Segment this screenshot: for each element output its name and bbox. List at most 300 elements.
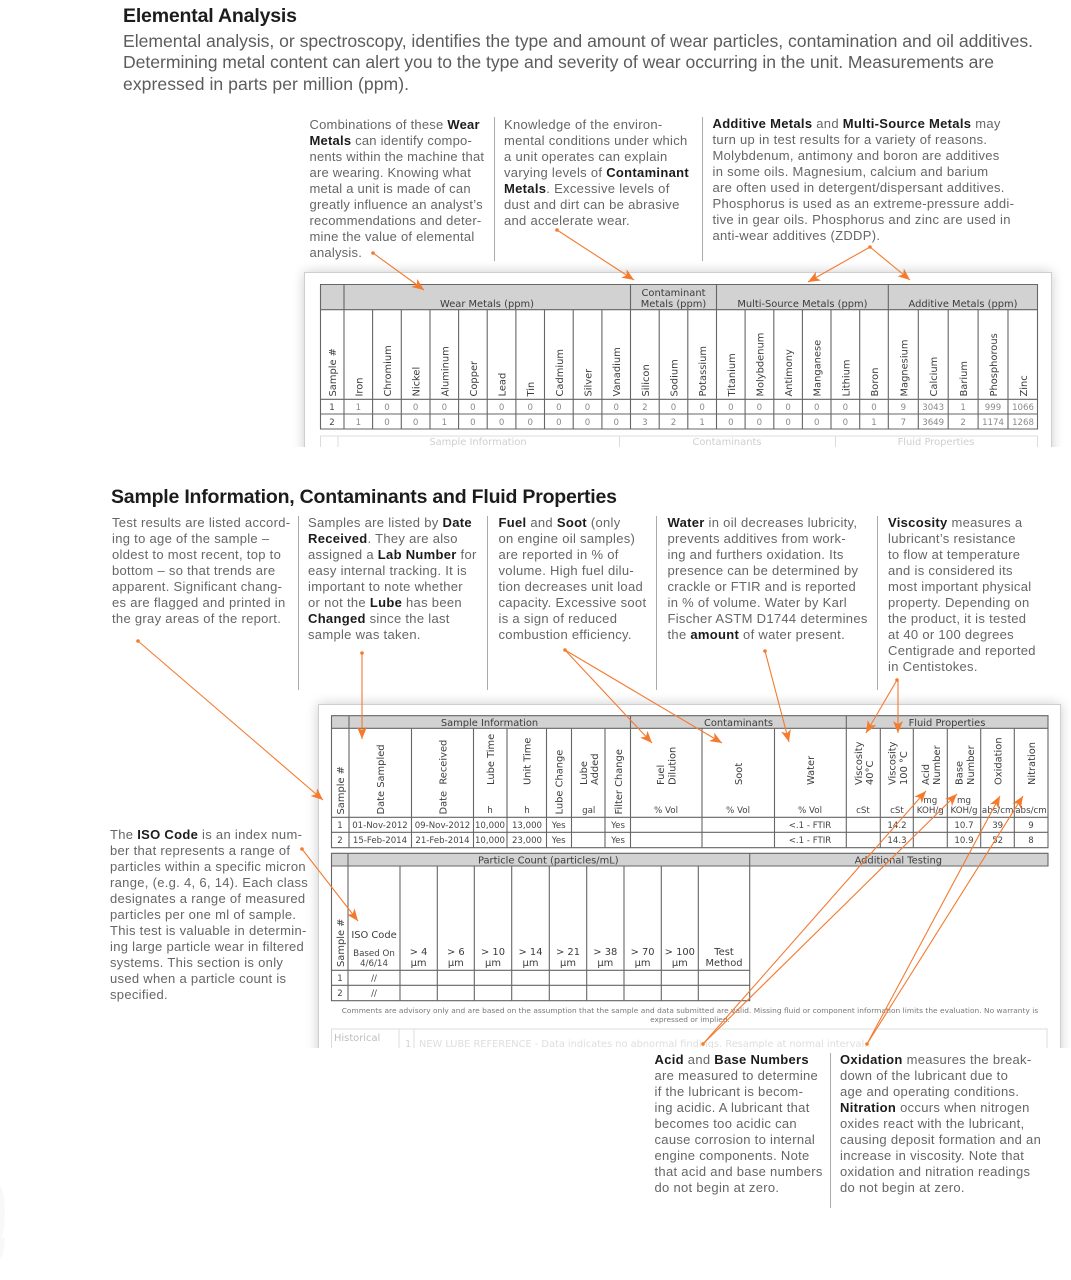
- text block: oxidation and nitration: [840, 1052, 1041, 1195]
- table: elemental results: [320, 284, 1038, 429]
- text block: contaminant metals: Metals. Excessive levels of: [504, 181, 670, 196]
- table 3 header band: [332, 853, 1048, 866]
- sample row 1 values: 0: [413, 403, 418, 413]
- text block: contaminant metals: varying levels of Contaminant: [504, 165, 689, 180]
- text block: acid and base numbers: ing acidic. A lubricant that: [654, 1100, 810, 1115]
- sample row 2 values: 3: [642, 418, 648, 428]
- sample row 1 values: 1: [960, 403, 966, 413]
- table: sample information, contaminants, fluid properties: Contaminants: [704, 718, 773, 729]
- table: particle count and additional testing: [332, 853, 1048, 1001]
- text block: additive and multi-source metals: Molybdenum, antimony and boron are additives: [712, 148, 1000, 163]
- text block: wear metals: greatly influence an analyst’s: [310, 197, 483, 212]
- row 1 values: Yes: [610, 821, 625, 831]
- table 2 header band: [332, 716, 1048, 728]
- sample row 2 values: 7: [901, 418, 906, 428]
- table: elemental results: Sample #: [328, 348, 339, 396]
- arrows: multi-source and additive metals: [808, 245, 910, 282]
- faded next table header: Sample Information: [429, 437, 527, 448]
- row 2 values: 21-Feb-2014: [415, 836, 470, 846]
- text block: date received: or not the Lube has been: [308, 595, 462, 610]
- text block: wear metals: Metals can identify compo-: [310, 133, 472, 148]
- table: sample information, contaminants, fluid properties: Number: [932, 744, 943, 785]
- text block: additive and multi-source metals: [712, 116, 1014, 243]
- sample row 2 values: 1: [699, 418, 705, 428]
- text block: test results: [112, 515, 290, 626]
- text block: fuel and soot: is a sign of reduced: [498, 611, 617, 626]
- sample row 2 values: 1174: [982, 418, 1004, 428]
- table: particle count and additional testing: µm: [411, 958, 427, 969]
- table: elemental results: Titanium: [727, 353, 738, 398]
- disclaimer text: Comments are advisory only and are based on the assumption that the sample and data submitted are valid. Missing fluid or component information limits the evaluation. No warranty is: [342, 1006, 1038, 1015]
- text block: contaminant metals: Knowledge of the environ-: [504, 117, 663, 132]
- sample row 1 values: 9: [901, 403, 906, 413]
- units row: % Vol: [654, 806, 678, 816]
- faded next table header: Contaminants: [692, 437, 762, 448]
- text block: viscosity: property. Depending on: [888, 595, 1030, 610]
- text block: contaminant metals: and accelerate wear.: [504, 213, 630, 228]
- sample row 2 values: 0: [384, 418, 390, 428]
- units row: KOH/g: [950, 806, 978, 816]
- text block: ISO code: This test is valuable in determin-: [110, 923, 307, 938]
- table: sample information, contaminants, fluid properties: Viscosity: [888, 741, 899, 785]
- sample row 1 values: 0: [785, 403, 791, 413]
- text block: water: prevents additives from work-: [668, 531, 846, 546]
- table: particle count and additional testing: µm: [560, 958, 576, 969]
- arrows: oxidation and nitration: [865, 796, 1023, 1046]
- table: particle count and additional testing: Particle Count (particles/mL): [478, 856, 619, 866]
- row 1 values: <.1 - FTIR: [789, 821, 831, 831]
- text block: test results: bottom – so that trends are: [112, 563, 275, 578]
- table: elemental results: Boron: [870, 368, 881, 396]
- table: elemental results: Cadmium: [555, 349, 566, 396]
- row 2 values: 52: [992, 836, 1003, 846]
- sample row 2 values: 0: [757, 418, 762, 428]
- text block: viscosity: in Centistokes.: [888, 659, 978, 674]
- text block: oxidation and nitration: oxidation and nitration readings: [840, 1164, 1030, 1179]
- units row: gal: [582, 806, 595, 816]
- sample row 2 values: 0: [556, 418, 562, 428]
- row 2 values: 23,000: [512, 836, 542, 846]
- sample row 2 values: 3649: [922, 418, 944, 428]
- units row: mg: [957, 796, 971, 806]
- row 2 values: 10.9: [954, 836, 974, 846]
- table: elemental results: Multi-Source Metals (ppm): [737, 299, 867, 310]
- text block: water: the amount of water present.: [668, 627, 845, 642]
- text block: date received: Samples are listed by Date: [308, 515, 472, 530]
- table: particle count and additional testing: > 4: [410, 947, 427, 958]
- text block: water: in % of volume. Water by Karl: [668, 595, 847, 610]
- table: particle count and additional testing: µm: [448, 958, 464, 969]
- table: particle count and additional testing: > 100: [665, 947, 695, 958]
- text block: contaminant metals: a unit operates can explain: [504, 149, 667, 164]
- table: sample information, contaminants, fluid properties: Base: [954, 761, 965, 785]
- faded historical comments row: [331, 1028, 1048, 1048]
- row 2 values: 2: [337, 836, 343, 846]
- text block: oxidation and nitration: do not begin at zero.: [840, 1180, 965, 1195]
- text block: ISO code: range, (e.g. 4, 6, 14). Each class: [110, 875, 308, 890]
- text block: wear metals: Combinations of these Wear: [310, 117, 480, 132]
- arrow: wear metals: [371, 251, 424, 290]
- arrows: fuel dilution and soot: [563, 648, 722, 743]
- text block: ISO code: The ISO Code is an index num-: [110, 827, 302, 842]
- text block: test results: Test results are listed accord-: [112, 515, 290, 530]
- text block: water: [668, 515, 868, 642]
- table: elemental results: Copper: [469, 360, 480, 396]
- row 1 values: 9: [1028, 821, 1034, 831]
- text block: water: ing and furthers oxidation. Its: [668, 547, 844, 562]
- text block: wear metals: recommendations and deter-: [310, 213, 481, 228]
- sample row 1 values: 0: [585, 403, 590, 413]
- text block: fuel and soot: capacity. Excessive soot: [498, 595, 646, 610]
- intro text block: Elemental analysis, or spectroscopy, identifies the type and amount of wear particles, contamination and oil additives.: [123, 31, 1033, 51]
- text block: wear metals: are wearing. Knowing what: [310, 165, 471, 180]
- text block: contaminant metals: mental conditions under which: [504, 133, 688, 148]
- table: sample information, contaminants, fluid properties: Nitration: [1027, 742, 1038, 785]
- sample row 1 values: 0: [556, 403, 562, 413]
- table: sample information, contaminants, fluid properties: Lube Time: [486, 734, 497, 785]
- text block: viscosity: Viscosity measures a: [888, 515, 1023, 530]
- text block: oxidation and nitration: age and operating conditions.: [840, 1084, 1019, 1099]
- row 2 values: 8: [1028, 836, 1034, 846]
- text block: wear metals: nents within the machine that: [310, 149, 484, 164]
- text block: acid and base numbers: [654, 1052, 823, 1195]
- table: particle count and additional testing: Additional Testing: [855, 856, 942, 866]
- text block: acid and base numbers: if the lubricant is becom-: [654, 1084, 803, 1099]
- text block: wear metals: [310, 117, 484, 260]
- text block: date received: assigned a Lab Number for: [308, 547, 477, 562]
- sample row 1 values: 999: [985, 403, 1001, 413]
- table: elemental results: Metals (ppm): [641, 299, 706, 310]
- table: sample information, contaminants, fluid properties: Number: [966, 744, 977, 785]
- row 2 values: <.1 - FTIR: [789, 836, 831, 846]
- table: particle count and additional testing: 4/6/14: [360, 959, 388, 969]
- row 2 values: 14.3: [887, 836, 907, 846]
- sample row 2 values: 0: [843, 418, 848, 428]
- row 1 values: 14.2: [887, 821, 907, 831]
- table: sample information, contaminants, fluid properties: Lube Change: [555, 750, 566, 814]
- text block: viscosity: Centigrade and reported: [888, 643, 1036, 658]
- row 2 values: [338, 836, 1034, 844]
- table: sample information, contaminants, fluid properties: Date Received: [439, 740, 450, 814]
- text block: ISO code: systems. This section is only: [110, 955, 283, 970]
- faded historical comments row: Historical: [334, 1033, 380, 1044]
- sample row 2 values: 1: [442, 418, 447, 428]
- table: elemental results: Vanadium: [612, 347, 623, 396]
- text block: fuel and soot: are reported in % of: [498, 547, 619, 562]
- sample row 1 values: 0: [843, 403, 848, 413]
- sample row 2 values: [330, 418, 1034, 425]
- sample row 1 values: [330, 404, 1034, 410]
- table: particle count and additional testing: µm: [635, 958, 651, 969]
- intro text block: [123, 31, 1033, 94]
- disclaimer text: expressed or implied.: [650, 1015, 730, 1024]
- table: elemental results: Contaminant: [642, 288, 706, 299]
- text block: oxidation and nitration: increase in viscosity. Note that: [840, 1148, 1024, 1163]
- text block: date received: [308, 515, 477, 642]
- faded next table header: Fluid Properties: [898, 437, 974, 448]
- table: sample information, contaminants, fluid properties: Filter Change: [614, 749, 625, 814]
- text block: test results: ing to age of the sample –: [112, 531, 270, 546]
- table: sample information, contaminants, fluid properties: Fluid Properties: [909, 718, 985, 729]
- row 1 values: 39: [992, 821, 1003, 831]
- table: particle count and additional testing: //: [371, 974, 377, 984]
- units row: % Vol: [726, 806, 750, 816]
- table: elemental results: Phosphorous: [989, 333, 1000, 396]
- table: elemental results: Additive Metals (ppm): [909, 299, 1017, 310]
- table: sample information, contaminants, fluid properties: Viscosity: [854, 741, 865, 785]
- text block: viscosity: the product, it is tested: [888, 611, 1026, 626]
- table: sample information, contaminants, fluid properties: Fuel: [656, 765, 667, 785]
- table: particle count and additional testing: //: [371, 989, 377, 999]
- table: particle count and additional testing: > 70: [631, 947, 655, 958]
- sample row 1 values: 0: [442, 403, 447, 413]
- row 1 values: 10,000: [475, 821, 505, 831]
- sample row 2 values: 0: [728, 418, 734, 428]
- row 1 values: 10.7: [954, 821, 974, 831]
- table: particle count and additional testing: µm: [597, 958, 613, 969]
- text block: additive and multi-source metals: anti-wear additives (ZDDP).: [712, 228, 880, 243]
- intro text block: expressed in parts per million (ppm).: [123, 74, 409, 94]
- row 1 values: 09-Nov-2012: [415, 821, 470, 831]
- table: elemental results: Antimony: [784, 349, 795, 396]
- table: particle count and additional testing: > 14: [519, 947, 542, 958]
- table: particle count and additional testing: 1: [337, 974, 343, 984]
- table: particle count and additional testing: > 38: [593, 947, 617, 958]
- table: sample information, contaminants, fluid properties: Added: [590, 754, 601, 785]
- text block: acid and base numbers: are measured to determine: [654, 1068, 818, 1083]
- sample row 2 values: 1: [871, 418, 877, 428]
- table: sample information, contaminants, fluid properties: Sample #: [336, 766, 347, 814]
- text block: contaminant metals: [504, 117, 689, 228]
- table: sample information, contaminants, fluid properties: Dilution: [668, 747, 679, 785]
- text block: water: crackle or FTIR and is reported: [668, 579, 856, 594]
- units row: % Vol: [798, 806, 822, 816]
- table: sample information, contaminants, fluid properties: Unit Time: [523, 738, 534, 785]
- text block: oxidation and nitration: down of the lubricant due to: [840, 1068, 1008, 1083]
- units row: h: [524, 806, 530, 816]
- text block: additive and multi-source metals: Phosphorus is used as an extreme-pressure addi-: [712, 196, 1014, 211]
- text block: test results: oldest to most recent, top to: [112, 547, 281, 562]
- table: elemental results: Calcium: [929, 357, 940, 396]
- row 2 values: 15-Feb-2014: [353, 836, 407, 846]
- table 1 header bands: [320, 284, 1038, 310]
- units row: h: [487, 806, 493, 816]
- units row: abs/cm: [982, 806, 1013, 816]
- sample row 2 values: 0: [613, 418, 619, 428]
- table: sample information, contaminants, fluid properties: Sample Information: [441, 718, 538, 729]
- table: sample information, contaminants, fluid properties: Soot: [734, 763, 745, 785]
- text block: acid and base numbers: Acid and Base Numbers: [654, 1052, 809, 1067]
- sample row 2 values: 0: [470, 418, 476, 428]
- text block: acid and base numbers: that acid and base numbers: [654, 1164, 823, 1179]
- units row: mg: [923, 796, 937, 806]
- text block: additive and multi-source metals: in some oils. Magnesium, calcium and barium: [712, 164, 988, 179]
- text block: date received: Changed since the last: [308, 611, 450, 626]
- text block: ISO code: specified.: [110, 987, 168, 1002]
- table: elemental results: Silicon: [641, 364, 652, 396]
- text block: fuel and soot: volume. High fuel dilu-: [498, 563, 634, 578]
- table: elemental results: Magnesium: [899, 340, 910, 396]
- text block: date received: important to note whether: [308, 579, 463, 594]
- text block: acid and base numbers: do not begin at zero.: [654, 1180, 779, 1195]
- sample row 1 values: 0: [613, 403, 619, 413]
- text block: additive and multi-source metals: are often used in detergent/dispersant additives.: [712, 180, 1005, 195]
- text block: acid and base numbers: cause corrosion to internal: [654, 1132, 815, 1147]
- table: elemental results: Lithium: [841, 360, 852, 396]
- table: elemental results: Tin: [526, 382, 537, 398]
- sample row 2 values: 0: [585, 418, 590, 428]
- text block: additive and multi-source metals: Additive Metals and Multi-Source Metals may: [712, 116, 1001, 131]
- text block: ISO code: used when a particle count is: [110, 971, 287, 986]
- table: sample information, contaminants, fluid properties: Water: [806, 755, 817, 785]
- sample row 1 values: 0: [470, 403, 476, 413]
- text block: contaminant metals: dust and dirt can be abrasive: [504, 197, 680, 212]
- sample row 1 values: 0: [499, 403, 504, 413]
- sample row 2 values: 0: [785, 418, 791, 428]
- table: sample information, contaminants, fluid properties: 40°C: [865, 760, 876, 785]
- sample row 2 values: 2: [329, 418, 335, 428]
- table: particle count and additional testing: ISO Code: [351, 930, 397, 941]
- sample row 1 values: 3043: [922, 403, 944, 413]
- sample row 1 values: 1066: [1012, 403, 1034, 413]
- table: elemental results: Iron: [354, 377, 365, 396]
- text block: date received: sample was taken.: [308, 627, 421, 642]
- table: elemental results: Manganese: [813, 340, 824, 396]
- table: sample information, contaminants, fluid properties: 100 °C: [899, 751, 910, 785]
- text block: ISO code: particles per one ml of sample.: [110, 907, 296, 922]
- table: particle count and additional testing: Test: [713, 947, 734, 958]
- units row: cSt: [890, 806, 904, 816]
- table: particle count and additional testing: µm: [523, 958, 538, 969]
- sample row 1 values: 0: [757, 403, 762, 413]
- text block: additive and multi-source metals: tive in gear oils. Phosphorus and zinc are used in: [712, 212, 1011, 227]
- text block: ISO code: ing large particle wear in filtered: [110, 939, 304, 954]
- sample row 2 values: 2: [671, 418, 676, 428]
- table: particle count and additional testing: > 10: [481, 947, 505, 958]
- text block: viscosity: and is considered its: [888, 563, 1013, 578]
- table: elemental results: Zinc: [1019, 375, 1030, 396]
- text block: water: Fischer ASTM D1744 determines: [668, 611, 868, 626]
- sample row 1 values: 0: [814, 403, 819, 413]
- panel: sample report: [318, 704, 1061, 1064]
- units row: [488, 798, 1046, 815]
- disclaimer text: [342, 1008, 1038, 1024]
- text block: water: presence can be determined by: [668, 563, 859, 578]
- sample row 1 values: 0: [671, 403, 676, 413]
- text block: oxidation and nitration: causing deposit formation and an: [840, 1132, 1041, 1147]
- row 1 values: 01-Nov-2012: [352, 821, 408, 831]
- text block: ISO code: designates a range of measured: [110, 891, 305, 906]
- sample row 2 values: 0: [814, 418, 819, 428]
- arrow: date received: [360, 651, 364, 739]
- table: elemental results: Potassium: [698, 346, 709, 396]
- table: particle count and additional testing: µm: [672, 958, 688, 969]
- text block: fuel and soot: tion decreases unit load: [498, 579, 643, 594]
- text block: water: Water in oil decreases lubricity,: [668, 515, 857, 530]
- sample row 1 values: 0: [384, 403, 390, 413]
- row 1 values: 1: [337, 821, 343, 831]
- text block: viscosity: at 40 or 100 degrees: [888, 627, 1014, 642]
- text block: wear metals: mine the value of elemental: [310, 229, 474, 244]
- arrow: water: [763, 649, 789, 742]
- table: elemental results: Wear Metals (ppm): [440, 299, 534, 310]
- sample row 1 values: 0: [527, 403, 533, 413]
- text block: ISO code: ber that represents a range of: [110, 843, 290, 858]
- text block: oxidation and nitration: Nitration occurs when nitrogen: [840, 1100, 1030, 1115]
- table: sample information, contaminants, fluid properties: Date Sampled: [376, 744, 387, 814]
- faded historical comments row: NEW LUBE REFERENCE - Data indicates no abnormal findings. Resample at normal interval.: [419, 1039, 867, 1050]
- table: sample information, contaminants, fluid properties: Lube: [579, 761, 590, 785]
- text block: wear metals: metal a unit is made of can: [310, 181, 471, 196]
- text block: oxidation and nitration: oxides react with the lubricant,: [840, 1116, 1024, 1131]
- heading: Sample Information, Contaminants and Fluid Properties: Sample Information, Contaminants and Fluid Properties: [111, 486, 617, 508]
- table: sample information, contaminants, fluid properties: Acid: [921, 764, 932, 785]
- text block: acid and base numbers: becomes too acidic can: [654, 1116, 797, 1131]
- table: particle count and additional testing: > 6: [447, 947, 465, 958]
- row 1 values: [338, 822, 1034, 829]
- sample row 2 values: 1: [356, 418, 361, 428]
- arrow: test results to sample rows: [136, 639, 323, 800]
- row 2 values: Yes: [610, 836, 625, 846]
- table: particle count and additional testing: Based On: [353, 949, 395, 959]
- text block: viscosity: lubricant’s resistance: [888, 531, 1016, 546]
- text block: fuel and soot: combustion efficiency.: [498, 627, 632, 642]
- text block: wear metals: analysis.: [310, 245, 362, 260]
- sample row 2 values: 0: [413, 418, 418, 428]
- sample row 1 values: 0: [699, 403, 705, 413]
- arrow: ISO code: [300, 847, 358, 921]
- intro text block: Determining metal content can alert you to the type and severity of wear occurring in the unit. Measurements are: [123, 52, 994, 72]
- table: elemental results: Aluminum: [440, 346, 451, 396]
- row 1 values: 13,000: [512, 821, 542, 831]
- sample row 2 values: 0: [527, 418, 533, 428]
- sample row 1 values: 2: [642, 403, 648, 413]
- row 2 values: 10,000: [475, 836, 505, 846]
- text block: additive and multi-source metals: turn up in test results for a variety of reasons.: [712, 132, 987, 147]
- text block: test results: the gray areas of the report.: [112, 611, 281, 626]
- arrows: viscosity: [866, 678, 899, 733]
- units row: KOH/g: [917, 806, 944, 816]
- text block: viscosity: [888, 515, 1036, 674]
- table: particle count and additional testing: µm: [485, 958, 501, 969]
- faded historical comments row: 1: [405, 1039, 411, 1050]
- table: elemental results: Barium: [959, 361, 970, 396]
- text block: viscosity: most important physical: [888, 579, 1031, 594]
- sample row 2 values: 2: [960, 418, 966, 428]
- table: elemental results: Chromium: [383, 345, 394, 396]
- sample row 1 values: 1: [356, 403, 361, 413]
- text block: viscosity: to flow at temperature: [888, 547, 1020, 562]
- text block: fuel and soot: [498, 515, 646, 642]
- table: elemental results: Sodium: [670, 359, 680, 396]
- text block: fuel and soot: on engine oil samples): [498, 531, 635, 546]
- units row: cSt: [856, 806, 870, 816]
- sample row 1 values: 0: [871, 403, 877, 413]
- sample row 2 values: 0: [499, 418, 504, 428]
- faded next table header: [320, 436, 1038, 447]
- table: particle count and additional testing: Sample #: [336, 919, 347, 967]
- arrow: contaminant metals: [555, 228, 634, 280]
- text block: acid and base numbers: engine components. Note: [654, 1148, 810, 1163]
- panel: elemental report: [304, 272, 1052, 462]
- table: sample information, contaminants, fluid properties: [332, 716, 1048, 848]
- table: particle count and additional testing: Method: [705, 958, 743, 969]
- sample row 1 values: 0: [728, 403, 734, 413]
- text block: ISO code: particles within a specific micron: [110, 859, 306, 874]
- table: elemental results: Molybdenum: [755, 333, 766, 396]
- units row: abs/cm: [1015, 806, 1047, 816]
- table: particle count and additional testing: 2: [337, 989, 343, 999]
